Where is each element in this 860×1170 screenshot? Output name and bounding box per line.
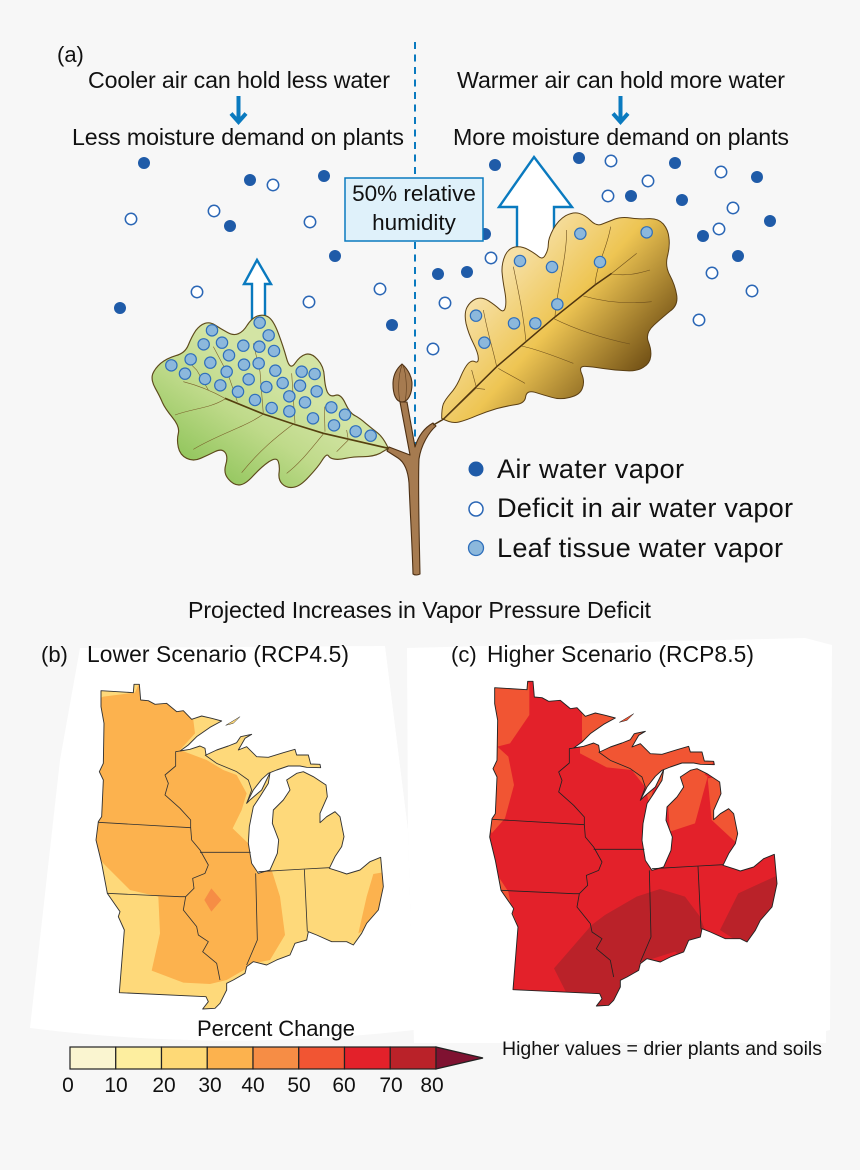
- callout: 50% relative humidity: humidity: [372, 210, 457, 235]
- arrow: warmer air down arrow: [613, 96, 628, 122]
- heading: higher scenario: Higher Scenario (RCP8.5): [487, 641, 754, 667]
- callout: 50% relative humidity: [345, 178, 483, 241]
- dashed divider line: [414, 42, 416, 445]
- color bar tick labels: 80: [420, 1074, 444, 1097]
- arrow: cooler air down arrow: [231, 96, 246, 122]
- legend: Leaf tissue water vapor: [497, 532, 783, 563]
- color bar tick labels: 40: [241, 1074, 265, 1097]
- heading: warmer air can hold more water: Warmer air can hold more water: [457, 67, 785, 93]
- stem and bud: [387, 364, 436, 575]
- air water vapor dots: [114, 152, 776, 331]
- panel label: (b): (b): [41, 642, 68, 667]
- arrow: large transpiration arrow: [499, 157, 572, 262]
- color bar swatches: [70, 1047, 483, 1069]
- callout: 50% relative humidity: 50% relative: [352, 181, 476, 206]
- heading: more moisture demand: More moisture demand on plants: [453, 124, 789, 150]
- heading: lower scenario: Lower Scenario (RCP4.5): [87, 641, 349, 667]
- color bar tick labels: 10: [104, 1074, 128, 1097]
- color bar tick labels: 60: [332, 1074, 356, 1097]
- right golden leaf: [433, 213, 677, 425]
- color bar tick labels: 30: [198, 1074, 222, 1097]
- color bar legend: [62, 1016, 483, 1097]
- color bar tick labels: 70: [379, 1074, 403, 1097]
- left green leaf: [152, 315, 388, 488]
- map: lower scenario RCP4.5: [96, 684, 384, 1010]
- note: higher values: Higher values = drier plants and soils: [502, 1038, 822, 1060]
- title: projected increases: Projected Increases in Vapor Pressure Deficit: [188, 597, 652, 623]
- color bar tick labels: [62, 1074, 444, 1097]
- arrow: small transpiration arrow: [244, 260, 271, 325]
- leaf tissue water vapor bubbles, green leaf: [166, 317, 376, 441]
- color bar title: Percent Change: [197, 1016, 355, 1041]
- air water vapor deficit dots: [125, 155, 758, 355]
- leaf tissue water vapor bubbles, golden leaf: [470, 227, 652, 348]
- panel label: (a): (a): [57, 42, 84, 67]
- color bar tick labels: 20: [152, 1074, 176, 1097]
- legend: Air water vapor: [497, 453, 684, 484]
- heading: cooler air can hold less water: Cooler air can hold less water: [88, 67, 390, 93]
- map: higher scenario RCP8.5: [489, 680, 778, 1006]
- legend: [468, 453, 793, 563]
- color bar tick labels: 0: [62, 1074, 74, 1097]
- heading: less moisture demand: Less moisture demand on plants: [72, 124, 404, 150]
- color bar tick labels: 50: [287, 1074, 311, 1097]
- legend: Deficit in air water vapor: [497, 492, 793, 523]
- panel label: (c): (c): [451, 642, 477, 667]
